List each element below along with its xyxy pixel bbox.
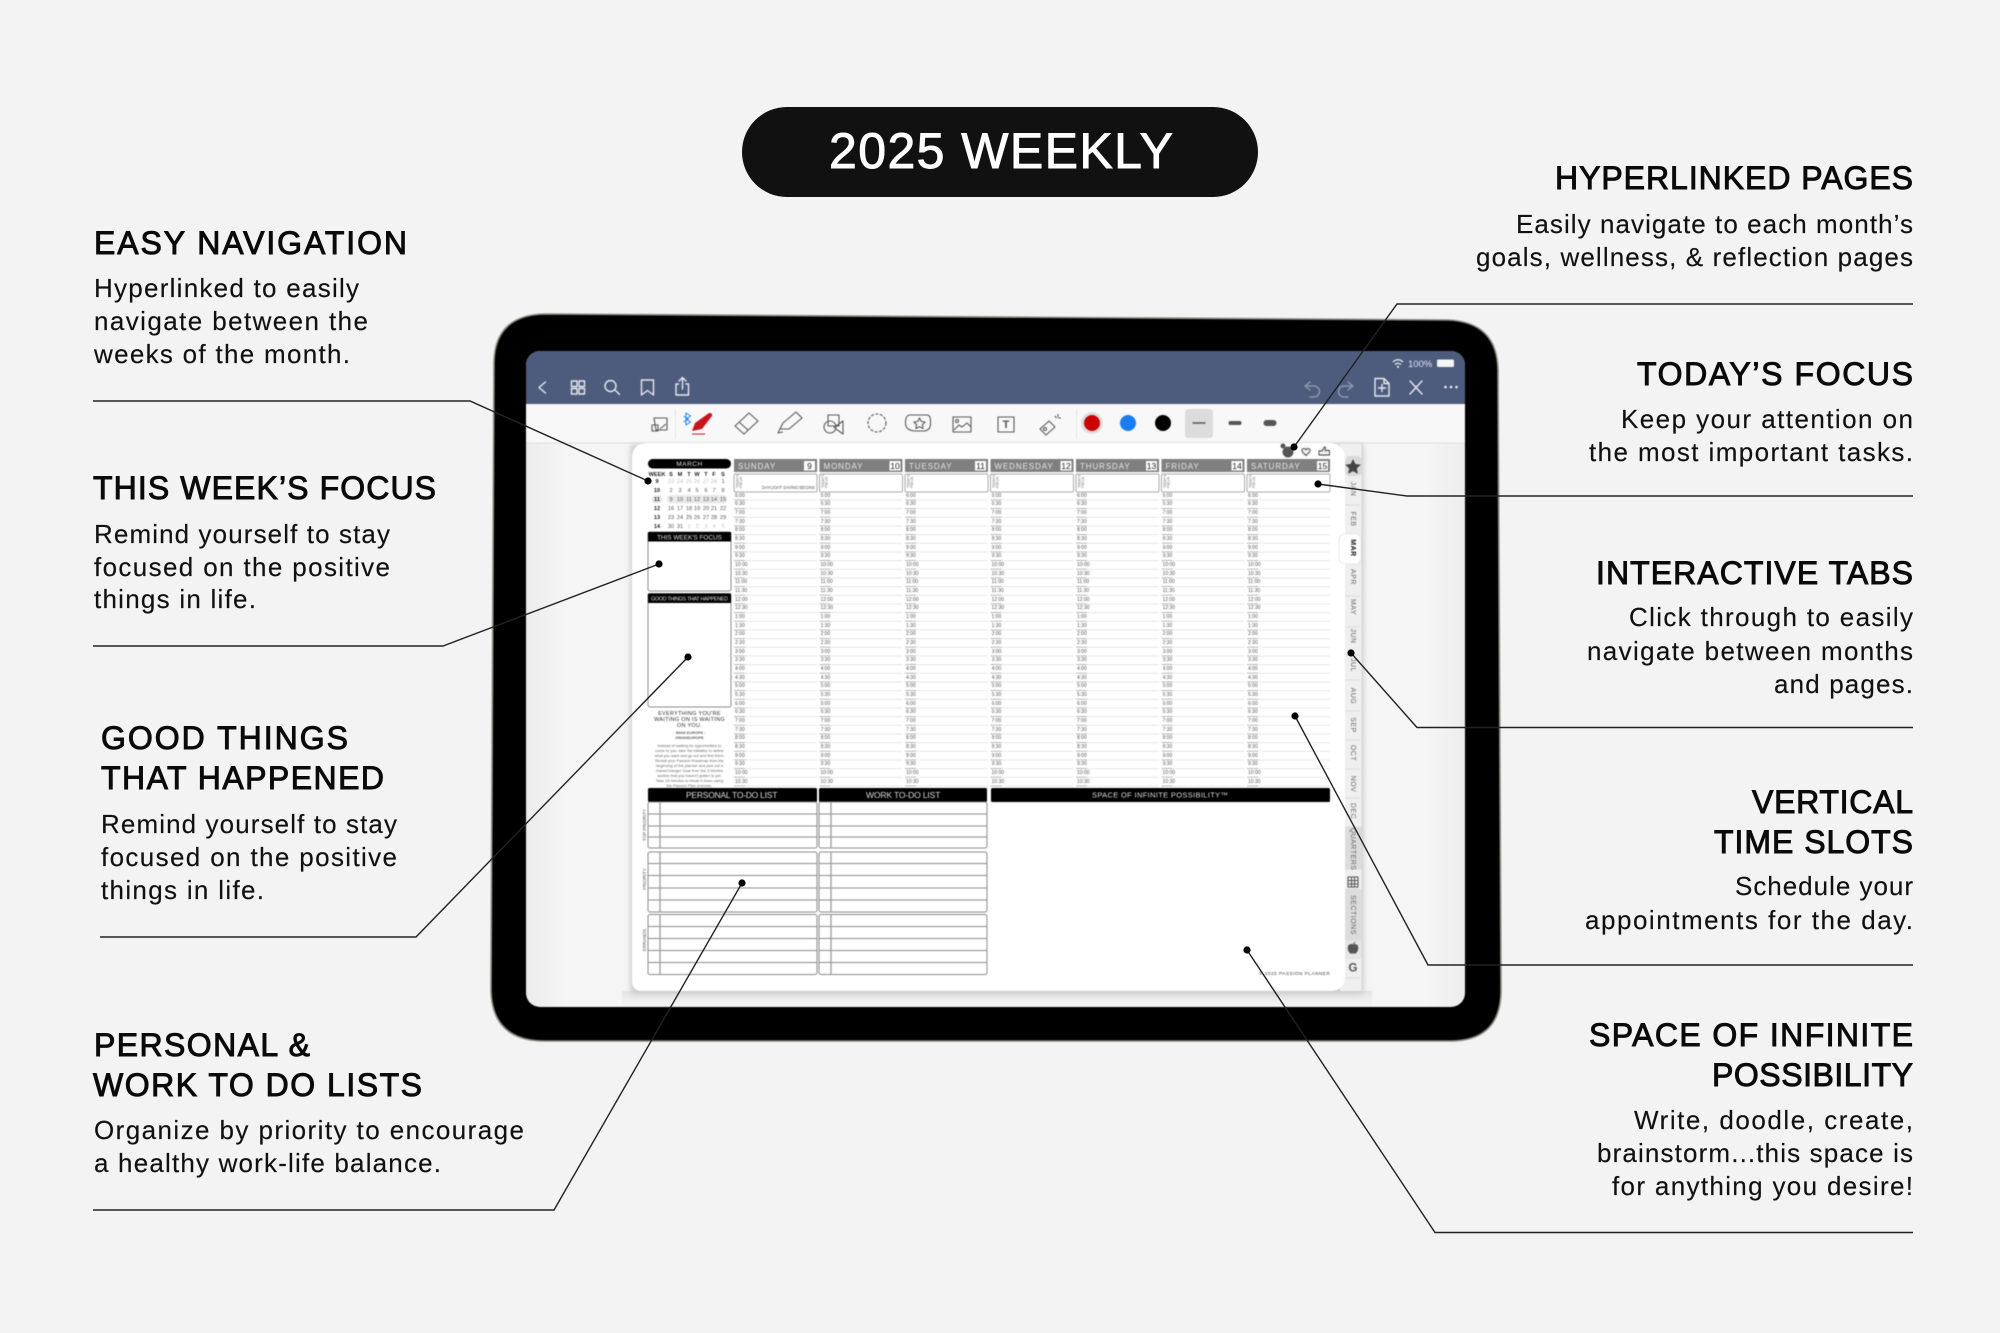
calendar numbers: 30 bbox=[668, 524, 674, 530]
icon: sticker bbox=[906, 415, 930, 431]
monday column bbox=[820, 459, 902, 788]
calendar numbers: 5 bbox=[721, 524, 725, 530]
month tab labels: APR bbox=[1349, 569, 1356, 585]
calendar numbers: 11 bbox=[686, 497, 692, 503]
tuesday column: TUESDAY bbox=[909, 462, 952, 471]
saturday column: SATURDAY bbox=[1251, 462, 1301, 471]
colour swatches bbox=[1081, 412, 1103, 434]
icon: star tab bbox=[1345, 459, 1361, 474]
space of infinite possibility header bbox=[991, 788, 1330, 802]
quote: Take 15 minutes to break it down using bbox=[656, 778, 723, 783]
leader line bbox=[1318, 484, 1913, 496]
icon: thumbnails bbox=[572, 381, 584, 394]
dot bbox=[1290, 443, 1298, 451]
calendar numbers: 22 bbox=[720, 506, 726, 512]
callout: space of infinite possibility bbox=[1243, 946, 1913, 1232]
work to-do list: WORK TO-DO LIST bbox=[866, 790, 941, 800]
icon: laser bbox=[1040, 414, 1061, 435]
tablet bezel bbox=[491, 314, 1501, 1041]
sunday column: 9 bbox=[807, 461, 812, 471]
calendar numbers: 1 bbox=[687, 524, 691, 530]
highlighted week bbox=[667, 495, 727, 504]
friday column: TODAY'S bbox=[1163, 475, 1167, 488]
monday column: 10 bbox=[890, 461, 900, 471]
saturday column bbox=[1247, 459, 1330, 788]
wednesday column: 6:00 6:30 7:00 7:30 8:00 8:30 9:00 9:30 10:00 10:30 11:00 11:30 12:00 12:30 1:00 1:30 2:00 2:30 3:00 3:30 4:00 4:30 5:00 5:30 6:00 6:30 7:00 7:30 8:00 8:30 9:00 9:30 10:00 10:30 bbox=[992, 493, 1004, 785]
quote: beginning of the planner and pick out a bbox=[656, 763, 724, 768]
tuesday column: FOCUS bbox=[910, 477, 914, 488]
good things box: GOOD THINGS THAT HAPPENED bbox=[651, 596, 728, 602]
calendar numbers: 26 bbox=[694, 479, 700, 485]
quote: the Passion Plan exercise. bbox=[667, 783, 712, 788]
sunday column: DAYLIGHT SAVING BEGINS bbox=[762, 485, 815, 490]
description: things in life. bbox=[101, 875, 264, 905]
icon: bookmark bbox=[642, 380, 654, 395]
heading: SPACE OF INFINITE bbox=[1589, 1017, 1913, 1053]
dot bbox=[644, 477, 652, 485]
bottom shade bbox=[622, 991, 1372, 999]
calendar numbers: 24 bbox=[677, 479, 683, 485]
quote: come to you, take the initiative to define bbox=[655, 748, 724, 753]
calendar numbers: 17 bbox=[677, 506, 683, 512]
description: Schedule your bbox=[1735, 871, 1913, 901]
calendar numbers: 23 bbox=[668, 515, 674, 521]
month tab labels: JUL bbox=[1349, 658, 1356, 672]
calendar numbers: 29 bbox=[720, 515, 726, 521]
tab column bbox=[1340, 444, 1362, 991]
mini calendar bbox=[648, 459, 731, 530]
description: navigate between months bbox=[1587, 636, 1913, 666]
tuesday column bbox=[905, 459, 988, 788]
month tab labels: QUARTERS bbox=[1349, 828, 1356, 870]
wednesday column: FOCUS bbox=[996, 477, 1000, 488]
heading: EASY NAVIGATION bbox=[94, 225, 407, 261]
thursday column: 13 bbox=[1147, 461, 1156, 471]
month tab labels: DEC bbox=[1349, 803, 1356, 819]
friday column: FRIDAY bbox=[1166, 462, 1200, 471]
calendar numbers: 27 bbox=[703, 515, 709, 521]
month tab labels: SEP bbox=[1349, 717, 1356, 733]
calendar numbers: 31 bbox=[677, 524, 683, 530]
personal to-do list: TOP PRIORITY bbox=[642, 809, 647, 841]
dot bbox=[738, 879, 746, 887]
calendar numbers: 27 bbox=[703, 479, 709, 485]
calendar numbers: 25 bbox=[686, 479, 692, 485]
calendar numbers: 6 bbox=[704, 488, 708, 494]
description: Click through to easily bbox=[1629, 602, 1913, 632]
description bbox=[1597, 1105, 1913, 1201]
quote: WAITING ON IS WAITING bbox=[654, 717, 725, 723]
callout: good things that happened bbox=[100, 653, 692, 937]
month tab labels: JUN bbox=[1349, 628, 1356, 644]
quote: section that you haven't gotten to yet. bbox=[657, 773, 722, 778]
calendar numbers: 26 bbox=[694, 515, 700, 521]
callout: easy navigation bbox=[93, 225, 652, 485]
heading: PERSONAL & bbox=[94, 1027, 310, 1063]
icon: eraser bbox=[735, 413, 758, 434]
nav icons left bbox=[539, 378, 688, 395]
description: weeks of the month. bbox=[93, 339, 350, 369]
saturday column: 6:00 6:30 7:00 7:30 8:00 8:30 9:00 9:30 10:00 10:30 11:00 11:30 12:00 12:30 1:00 1:30 2:00 2:30 3:00 3:30 4:00 4:30 5:00 5:30 6:00 6:30 7:00 7:30 8:00 8:30 9:00 9:30 10:00 10:30 bbox=[1248, 493, 1261, 785]
calendar numbers: 7 bbox=[712, 488, 716, 494]
friday column: 6:00 6:30 7:00 7:30 8:00 8:30 9:00 9:30 10:00 10:30 11:00 11:30 12:00 12:30 1:00 1:30 2:00 2:30 3:00 3:30 4:00 4:30 5:00 5:30 6:00 6:30 7:00 7:30 8:00 8:30 9:00 9:30 10:00 10:30 bbox=[1162, 493, 1175, 785]
personal to-do list: ERRANDS bbox=[642, 929, 647, 951]
heading: HYPERLINKED PAGES bbox=[1555, 160, 1913, 196]
sunday column: SUNDAY bbox=[738, 462, 776, 471]
description: Write, doodle, create, bbox=[1634, 1105, 1913, 1135]
description bbox=[93, 273, 368, 369]
icon: apple tab bbox=[1348, 942, 1358, 954]
description: Organize by priority to encourage bbox=[94, 1115, 524, 1145]
leader line bbox=[1295, 716, 1913, 965]
heading: VERTICAL bbox=[1752, 784, 1913, 820]
leader line bbox=[1351, 653, 1913, 728]
title pill bbox=[742, 107, 1258, 197]
calendar numbers: 8 bbox=[721, 488, 725, 494]
calendar numbers: WEEK bbox=[649, 472, 665, 478]
quote bbox=[654, 711, 725, 788]
calendar numbers: 18 bbox=[686, 506, 692, 512]
month tab labels: SECTIONS bbox=[1349, 895, 1356, 935]
description: focused on the positive bbox=[94, 552, 390, 582]
heading: TODAY’S FOCUS bbox=[1637, 356, 1913, 392]
dot bbox=[1347, 649, 1355, 657]
nav icons right bbox=[1305, 378, 1458, 397]
heading: TIME SLOTS bbox=[1714, 824, 1913, 860]
this week's focus box bbox=[648, 532, 731, 591]
icon: page switch bbox=[652, 418, 667, 431]
quote: GameChanger Goal from the 3 Months bbox=[656, 768, 723, 773]
month tab labels: OCT bbox=[1349, 745, 1356, 761]
description: Remind yourself to stay bbox=[94, 519, 390, 549]
icon: more bbox=[1444, 386, 1458, 388]
calendar numbers: T bbox=[687, 472, 691, 478]
icon: highlighter bbox=[778, 412, 802, 433]
calendar numbers: 12 bbox=[654, 506, 660, 512]
icon: text box bbox=[998, 417, 1014, 432]
friday column bbox=[1162, 459, 1244, 788]
calendar numbers: 14 bbox=[711, 497, 717, 503]
thursday column: FOCUS bbox=[1081, 477, 1085, 488]
saturday column: FOCUS bbox=[1252, 477, 1256, 488]
icon: grid tab bbox=[1348, 877, 1358, 887]
planner page bbox=[632, 443, 1345, 991]
calendar numbers: S bbox=[669, 472, 673, 478]
calendar numbers: 21 bbox=[711, 506, 717, 512]
description: for anything you desire! bbox=[1612, 1171, 1913, 1201]
top navigation bar bbox=[526, 351, 1465, 404]
quote: ON YOU. bbox=[677, 723, 702, 729]
quote: EVERYTHING YOU'RE bbox=[658, 711, 721, 717]
description bbox=[1589, 404, 1913, 467]
top page icons bbox=[1280, 444, 1330, 458]
monday column: 6:00 6:30 7:00 7:30 8:00 8:30 9:00 9:30 10:00 10:30 11:00 11:30 12:00 12:30 1:00 1:30 2:00 2:30 3:00 3:30 4:00 4:30 5:00 5:30 6:00 6:30 7:00 7:30 8:00 8:30 9:00 9:30 10:00 10:30 bbox=[820, 493, 833, 785]
description bbox=[94, 519, 390, 614]
icon: search bbox=[605, 381, 620, 394]
calendar numbers: M bbox=[678, 472, 683, 478]
calendar numbers: T bbox=[704, 472, 708, 478]
month tab labels: AUG bbox=[1349, 688, 1356, 704]
personal to-do list: PERSONAL TO-DO LIST bbox=[686, 790, 778, 800]
thursday column: TODAY'S bbox=[1078, 475, 1082, 488]
sunday column: TODAY'S bbox=[736, 475, 740, 488]
description: appointments for the day. bbox=[1585, 905, 1913, 935]
heading: THIS WEEK’S FOCUS bbox=[93, 470, 436, 506]
calendar numbers: 1 bbox=[721, 479, 725, 485]
status bar bbox=[1393, 359, 1454, 370]
monday column: FOCUS bbox=[824, 477, 828, 488]
heading bbox=[1714, 784, 1913, 860]
callout: vertical time slots bbox=[1291, 712, 1913, 965]
description bbox=[1585, 871, 1913, 935]
calendar numbers: 15 bbox=[720, 497, 726, 503]
calendar numbers: 28 bbox=[711, 479, 717, 485]
description bbox=[1587, 602, 1913, 699]
icon: shapes bbox=[824, 415, 843, 434]
title pill: 2025 WEEKLY bbox=[829, 123, 1173, 179]
heading: INTERACTIVE TABS bbox=[1596, 555, 1913, 591]
description: the most important tasks. bbox=[1589, 437, 1913, 467]
callout: personal and work to do lists bbox=[93, 879, 746, 1210]
wednesday column: 12 bbox=[1061, 461, 1071, 471]
toolbar tools bbox=[652, 409, 1276, 439]
wednesday column: WEDNESDAY bbox=[994, 462, 1054, 471]
tablet screen bbox=[526, 351, 1465, 1007]
friday column: FOCUS bbox=[1166, 477, 1170, 488]
icon: redo bbox=[1338, 382, 1353, 397]
heading: POSSIBILITY bbox=[1712, 1057, 1913, 1093]
month tab labels bbox=[1349, 482, 1356, 935]
calendar numbers: 11 bbox=[654, 497, 660, 503]
good things box bbox=[648, 594, 731, 707]
description: goals, wellness, & reflection pages bbox=[1476, 242, 1913, 272]
icon: mickey bbox=[1282, 446, 1294, 458]
weekly day columns bbox=[734, 459, 1331, 788]
description: focused on the positive bbox=[101, 842, 397, 872]
icon: close bbox=[1410, 381, 1422, 394]
icon: share bbox=[676, 378, 688, 395]
month tab labels: FEB bbox=[1349, 511, 1356, 527]
calendar numbers: F bbox=[712, 472, 716, 478]
icon: image bbox=[953, 417, 971, 432]
heading bbox=[101, 720, 384, 796]
monday column: MONDAY bbox=[824, 462, 863, 471]
dot bbox=[655, 560, 663, 568]
month header bbox=[648, 459, 731, 468]
page shadow bbox=[631, 445, 1363, 993]
personal to-do list bbox=[642, 788, 817, 974]
description: Keep your attention on bbox=[1621, 404, 1913, 434]
dot bbox=[1291, 712, 1299, 720]
heading bbox=[1589, 1017, 1913, 1093]
thursday column: 6:00 6:30 7:00 7:30 8:00 8:30 9:00 9:30 10:00 10:30 11:00 11:30 12:00 12:30 1:00 1:30 2:00 2:30 3:00 3:30 4:00 4:30 5:00 5:30 6:00 6:30 7:00 7:30 8:00 8:30 9:00 9:30 10:00 10:30 bbox=[1077, 493, 1090, 785]
monday column: TODAY'S bbox=[821, 475, 825, 488]
calendar numbers: 16 bbox=[668, 506, 674, 512]
calendar numbers: W bbox=[694, 472, 700, 478]
calendar numbers: 13 bbox=[703, 497, 709, 503]
wednesday column bbox=[990, 459, 1074, 788]
calendar numbers: 10 bbox=[677, 497, 683, 503]
leader line bbox=[1247, 950, 1913, 1232]
leader line bbox=[93, 401, 648, 481]
description: a healthy work-life balance. bbox=[94, 1148, 441, 1178]
dot bbox=[684, 653, 692, 661]
month tab labels: NOV bbox=[1349, 776, 1356, 792]
icon: add page bbox=[1375, 378, 1389, 396]
tablet mockup bbox=[491, 314, 1501, 1041]
heading: WORK TO DO LISTS bbox=[93, 1067, 422, 1103]
copyright: © 2025 PASSION PLANNER bbox=[1259, 970, 1331, 977]
quote: #IMANEUROPE bbox=[675, 735, 704, 740]
leader line bbox=[93, 564, 659, 646]
quote: Revisit your Passion Roadmap from the bbox=[655, 758, 724, 763]
friday column: 14 bbox=[1232, 461, 1242, 471]
leader line bbox=[93, 883, 742, 1210]
active MAR tab bbox=[1339, 534, 1361, 564]
tuesday column: 11 bbox=[976, 461, 985, 471]
toolbar tools: T bbox=[1003, 419, 1010, 431]
callout: interactive tabs bbox=[1347, 555, 1913, 728]
tuesday column: 6:00 6:30 7:00 7:30 8:00 8:30 9:00 9:30 10:00 10:30 11:00 11:30 12:00 12:30 1:00 1:30 2:00 2:30 3:00 3:30 4:00 4:30 5:00 5:30 6:00 6:30 7:00 7:30 8:00 8:30 9:00 9:30 10:00 10:30 bbox=[906, 493, 919, 785]
icon: thumbs up bbox=[1318, 446, 1330, 457]
calendar numbers: 23 bbox=[668, 479, 674, 485]
sunday column bbox=[734, 459, 817, 788]
month tab labels: JAN bbox=[1349, 482, 1356, 496]
calendar numbers: 9 bbox=[655, 479, 659, 485]
callout: this week's focus bbox=[93, 470, 663, 646]
icon: undo bbox=[1305, 382, 1320, 397]
calendar numbers bbox=[649, 472, 726, 530]
this week's focus box: THIS WEEK'S FOCUS bbox=[657, 534, 723, 542]
description: Remind yourself to stay bbox=[101, 809, 397, 839]
quote: - IMAN EUROPE - bbox=[673, 730, 706, 735]
calendar numbers: 24 bbox=[677, 515, 683, 521]
description: brainstorm...this space is bbox=[1597, 1138, 1913, 1168]
time slot rules bbox=[734, 492, 1331, 787]
calendar numbers: 4 bbox=[687, 488, 691, 494]
leader line bbox=[100, 657, 688, 937]
calendar numbers: 12 bbox=[694, 497, 700, 503]
mini calendar: MARCH bbox=[676, 461, 703, 468]
description: and pages. bbox=[1774, 669, 1913, 699]
description: Easily navigate to each month’s bbox=[1516, 209, 1913, 239]
calendar numbers: 14 bbox=[654, 524, 661, 530]
dot bbox=[1314, 480, 1322, 488]
callout: today's focus bbox=[1314, 356, 1913, 496]
quote: what you want and go out and find them. bbox=[654, 753, 725, 758]
description bbox=[94, 1115, 524, 1178]
calendar numbers: 3 bbox=[704, 524, 708, 530]
calendar numbers: 20 bbox=[703, 506, 709, 512]
calendar numbers: 2 bbox=[669, 488, 673, 494]
icon: back bbox=[539, 382, 546, 393]
space of infinite possibility header: SPACE OF INFINITE POSSIBILITY™ bbox=[1092, 790, 1228, 800]
tuesday column: TODAY'S bbox=[906, 475, 910, 488]
month tab labels: MAY bbox=[1349, 599, 1356, 615]
calendar numbers: 3 bbox=[678, 488, 682, 494]
saturday column: 15 bbox=[1318, 461, 1327, 471]
saturday column: TODAY'S bbox=[1248, 475, 1252, 488]
icon: heart bbox=[1300, 446, 1312, 457]
calendar numbers: 13 bbox=[654, 515, 660, 521]
calendar numbers: 28 bbox=[711, 515, 717, 521]
personal to-do list: PRIORITY bbox=[642, 868, 647, 890]
calendar numbers: 10 bbox=[654, 488, 660, 494]
heading bbox=[93, 1027, 422, 1103]
drawing toolbar bbox=[526, 404, 1465, 443]
calendar numbers: 25 bbox=[686, 515, 692, 521]
calendar numbers: 2 bbox=[695, 524, 699, 530]
calendar numbers: 19 bbox=[694, 506, 700, 512]
status bar: 100% bbox=[1408, 359, 1433, 370]
description: navigate between the bbox=[94, 306, 368, 336]
callout: hyperlinked pages bbox=[1290, 160, 1913, 451]
icon: lasso bbox=[868, 414, 886, 432]
heading: GOOD THINGS bbox=[101, 720, 348, 756]
quote: Instead of waiting for opportunities to bbox=[658, 743, 721, 748]
sunday column: FOCUS bbox=[739, 477, 743, 488]
calendar numbers: S bbox=[721, 472, 725, 478]
work to-do list bbox=[819, 788, 987, 974]
dot bbox=[1243, 946, 1251, 954]
icon: Google tab: G bbox=[1349, 962, 1358, 974]
thursday column: THURSDAY bbox=[1080, 462, 1131, 471]
icon: red pen bbox=[692, 413, 712, 431]
description bbox=[101, 809, 397, 905]
calendar numbers: 5 bbox=[695, 488, 699, 494]
calendar numbers: 9 bbox=[669, 497, 673, 503]
description: things in life. bbox=[94, 584, 256, 614]
description bbox=[1476, 209, 1913, 272]
icon: bluetooth bbox=[684, 413, 690, 425]
stroke width options bbox=[1185, 409, 1213, 438]
wednesday column: TODAY'S bbox=[992, 475, 996, 488]
description: Hyperlinked to easily bbox=[94, 273, 359, 303]
calendar numbers: 4 bbox=[712, 524, 716, 530]
month tab labels: MAR bbox=[1349, 539, 1356, 557]
sunday column: 6:00 6:30 7:00 7:30 8:00 8:30 9:00 9:30 10:00 10:30 11:00 11:30 12:00 12:30 1:00 1:30 2:00 2:30 3:00 3:30 4:00 4:30 5:00 5:30 6:00 6:30 7:00 7:30 8:00 8:30 9:00 9:30 10:00 10:30 bbox=[735, 493, 748, 785]
thursday column bbox=[1076, 459, 1159, 788]
leader line bbox=[1294, 304, 1913, 447]
heading: THAT HAPPENED bbox=[101, 760, 384, 796]
